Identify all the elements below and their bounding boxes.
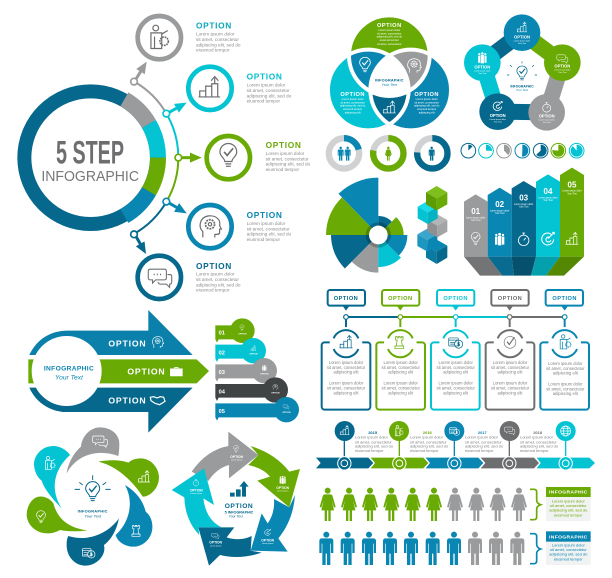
card column 4: Lorem ipsum dolor — [493, 381, 528, 386]
main ring — [24, 91, 157, 224]
arrow column 01 — [464, 194, 488, 257]
center text — [44, 366, 94, 381]
arrow column 04 — [536, 174, 560, 257]
card column 1: adipiscing elit — [334, 370, 359, 375]
arrow column 02 — [488, 188, 512, 257]
card column 2: adipiscing elit — [388, 370, 414, 375]
cycle arrow: dark: Lorem ipsum — [210, 544, 222, 547]
node: green: Your Text — [558, 71, 567, 74]
donut 3 — [417, 138, 447, 168]
cycle arrow: blue: Lorem ipsum — [262, 542, 274, 545]
panel: pentagon blob diagram — [464, 14, 581, 131]
arrow: blue — [163, 198, 187, 213]
banner 05 — [215, 397, 299, 422]
text block: option 4: eiusmod tempor — [247, 237, 280, 242]
banner 04 — [215, 377, 288, 403]
center bulb and text: Your Text — [84, 514, 102, 519]
center: bulb and text: INFOGRAPHIC — [510, 85, 534, 89]
mini pie 1 — [461, 143, 476, 158]
card column 3: Lorem ipsum dolor — [438, 381, 473, 386]
node: blue: Your Text — [518, 42, 527, 45]
node: green — [544, 44, 581, 81]
banner 03 — [215, 358, 277, 383]
center chart and text: 5 INFOGRAPHIC — [225, 511, 254, 515]
node: blue: OPTION — [514, 35, 530, 40]
panel: year timeline — [316, 421, 595, 565]
card column 5: adipiscing elit — [553, 391, 579, 396]
arrow column 05: Your Text — [567, 192, 577, 195]
panel: swirl flower diagram — [27, 427, 159, 566]
text block: option 1: OPTION — [196, 20, 232, 30]
card column 4: adipiscing elit — [498, 390, 523, 395]
node: green: OPTION — [554, 64, 570, 69]
pictogram row: men — [319, 532, 524, 565]
card column 2: adipiscing elit — [388, 390, 414, 395]
text: blue option: OPTION — [414, 92, 439, 98]
text block: option 1: adipiscing elit, sed do — [196, 42, 241, 47]
banner 01 — [215, 318, 255, 343]
arrow column 03 — [512, 181, 536, 257]
panel: big three way arrow — [28, 310, 209, 433]
text block: option 3: sit amet, consectetur — [266, 156, 309, 161]
step circle 3 — [207, 136, 250, 179]
cycle arrow: cyan: OPTION — [190, 488, 203, 492]
text block: option 4: sit amet, consectetur — [247, 226, 290, 231]
cycle arrow: gray: Lorem ipsum — [231, 459, 243, 462]
arrow column 03: Lorem ipsum dolor — [514, 203, 534, 206]
center: bulb and text: Your Text — [516, 88, 528, 92]
text: blue option: Lorem ipsum dolor — [416, 97, 438, 101]
mini pie 4 — [515, 143, 530, 158]
cycle arrow: green — [248, 446, 300, 507]
arrow column 02: Your Text — [495, 212, 505, 215]
node: gray: Your Text — [543, 121, 551, 124]
text: green option: Lorem ipsum dolor — [378, 28, 400, 32]
cycle arrow: cyan: Lorem ipsum — [191, 492, 202, 495]
arrow: middle green — [28, 359, 209, 383]
card column 5: adipiscing elit — [553, 371, 579, 376]
timeline text 2017: eiusmod tempor — [465, 448, 494, 453]
arrow column 01: 01 — [471, 207, 481, 216]
cycle arrow: cyan — [172, 468, 222, 535]
text: cyan option: adipiscing elit, sed do — [340, 104, 366, 108]
card column 1 — [322, 290, 370, 410]
callout: green: Lorem ipsum dolor — [552, 498, 585, 503]
venn circle: cyan — [328, 50, 409, 130]
petal: left green — [27, 497, 87, 533]
text: cyan option: Lorem ipsum dolor — [342, 97, 364, 101]
text: green option: sit amet, consectetur — [377, 42, 402, 46]
mini pie 6 — [551, 143, 566, 158]
card column 3 — [431, 290, 480, 410]
timeline text 2018: sit amet, consectetur — [520, 439, 557, 444]
timeline text 2016: 2016 — [423, 430, 433, 435]
node: cyan: Lorem ipsum dolor — [474, 70, 491, 73]
banner 04: OPTION — [271, 393, 280, 395]
cycle arrow: blue — [251, 495, 295, 552]
arrow: dark — [131, 231, 146, 254]
callout: blue: INFOGRAPHIC — [549, 534, 588, 540]
step circle 2 — [188, 67, 232, 110]
connectors — [482, 33, 562, 112]
venn outlines — [328, 15, 451, 130]
panel: option cards — [322, 290, 589, 410]
banner 03: OPTION — [260, 373, 269, 375]
arrow column shadows — [464, 257, 584, 276]
timeline text 2017: Lorem ipsum dolor — [465, 435, 499, 440]
text block: option 5: sit amet, consectetur — [196, 277, 239, 282]
text block: option 4: adipiscing elit, sed do — [247, 232, 292, 237]
connector arc: gray — [134, 82, 167, 114]
text: cyan option: OPTION — [340, 92, 365, 98]
arrow column 02: Lorem ipsum dolor — [490, 209, 510, 212]
banner 02: OPTION — [249, 353, 258, 355]
text block: option 2: OPTION — [247, 71, 283, 81]
card column 2: Lorem ipsum dolor — [383, 360, 418, 365]
callout: blue: Lorem ipsum dolor — [552, 542, 585, 547]
petal: right green — [98, 458, 159, 497]
timeline text 2015: 2015 — [368, 430, 378, 435]
label: middle option — [127, 366, 183, 376]
radial pie chart — [326, 178, 407, 273]
text block: option 4: Lorem ipsum dolor — [247, 221, 286, 226]
center chart and text — [225, 481, 254, 518]
node: blue: Lorem ipsum dolor — [514, 40, 531, 43]
timeline text 2018: adipiscing elit, sed do — [520, 444, 559, 449]
timeline text 2016 — [410, 430, 449, 453]
card column 2: OPTION — [388, 296, 413, 302]
brace: blue — [530, 534, 541, 564]
label: lower option — [108, 395, 165, 405]
card column 2: sit amet, consectetur — [381, 386, 420, 391]
text: blue option — [414, 92, 440, 115]
node: cyan: Your Text — [478, 72, 487, 75]
arrow column 04: 04 — [544, 187, 553, 196]
petal: gray — [67, 427, 119, 473]
overlap: center — [372, 58, 407, 94]
timeline text 2015: Lorem ipsum dolor — [355, 435, 389, 440]
text block: option 5: Lorem ipsum dolor — [196, 272, 235, 277]
text: green option — [377, 23, 403, 46]
timeline text 2016: Lorem ipsum dolor — [410, 435, 444, 440]
arrow column 01: Lorem ipsum dolor — [466, 216, 486, 219]
banner 05: 05 — [219, 409, 225, 415]
card column 5 — [540, 290, 589, 410]
arrow: upper blue — [29, 310, 193, 355]
text block: option 1: sit amet, consectetur — [196, 37, 239, 42]
card column 1: sit amet, consectetur — [327, 365, 366, 370]
text: green option: sit amet, consectetur — [377, 31, 402, 35]
panel: 5 step circular infographic — [24, 16, 311, 299]
donut 2 — [373, 138, 403, 168]
text block: option 3: eiusmod tempor — [266, 167, 299, 172]
arrow column 05: 05 — [568, 180, 577, 189]
text block: option 2: adipiscing elit, sed do — [247, 93, 292, 98]
cycle arrow: gray — [192, 432, 258, 481]
text block: option 3: adipiscing elit, sed do — [266, 162, 311, 167]
node: green: Lorem ipsum dolor — [554, 69, 571, 72]
arrow: lower dark — [29, 388, 193, 433]
node: dark: OPTION — [490, 113, 506, 118]
panel: donuts, mini pies, radial pie, cubes and arrow columns — [326, 138, 584, 276]
step circle 5 — [138, 256, 181, 299]
center text: Your Text — [55, 374, 84, 381]
banner 02 — [215, 338, 266, 363]
callout: green: eiusmod tempor — [554, 512, 583, 517]
card column 1: adipiscing elit — [334, 390, 359, 395]
card column 3: adipiscing elit — [443, 390, 469, 395]
cycle arrow: dark — [198, 527, 262, 566]
callout: blue: eiusmod tempor — [554, 556, 583, 561]
icon: bulb — [360, 57, 370, 72]
milestone 2015 — [335, 421, 355, 470]
text block: option 2: sit amet, consectetur — [247, 88, 290, 93]
node: gray: OPTION — [539, 114, 555, 119]
timeline text 2015: eiusmod tempor — [355, 448, 384, 453]
icon: chart — [383, 101, 396, 113]
banner 04: 04 — [219, 390, 226, 396]
text block: option 4 — [247, 210, 292, 242]
label: lower option: OPTION — [108, 395, 147, 405]
card column 1: Lorem ipsum dolor — [329, 381, 364, 386]
text: green option: eiusmod tempor — [380, 38, 399, 42]
overlap: green and blue — [393, 52, 428, 88]
center: bulb and text — [507, 61, 537, 92]
label: upper option: OPTION — [108, 338, 147, 348]
text: cyan option: eiusmod tempor — [343, 107, 362, 111]
step circle 1 — [138, 16, 181, 59]
text block: option 5 — [196, 261, 241, 293]
arrow column 02: 02 — [495, 200, 505, 209]
timeline text 2016: adipiscing elit, sed do — [410, 444, 449, 449]
center chart and text: OPTION — [225, 503, 253, 510]
milestone 2019 — [556, 421, 576, 470]
arrow: gray — [131, 62, 147, 85]
petal: cyan — [34, 446, 70, 508]
banner 05: OPTION — [282, 412, 291, 414]
donut 1 — [329, 138, 359, 168]
text: cyan option — [340, 92, 366, 115]
node: blue — [504, 14, 540, 51]
panel: five arrow cycle — [172, 432, 300, 566]
timeline text 2017: sit amet, consectetur — [465, 439, 502, 444]
connector arc: green — [167, 158, 178, 201]
text block: option 1: Lorem ipsum dolor — [196, 32, 235, 37]
text: venn center: Your Text — [382, 83, 398, 87]
text block: option 3: Lorem ipsum dolor — [266, 151, 305, 156]
card column 4: adipiscing elit — [498, 370, 523, 375]
arrow column 05: Lorem ipsum dolor — [562, 190, 582, 193]
text: cyan option: sit amet, consectetur — [340, 100, 365, 104]
mini pie 2 — [479, 143, 493, 158]
arrow column 01: Your Text — [471, 219, 481, 222]
card column 4 — [486, 290, 534, 410]
card column 2: sit amet, consectetur — [381, 365, 420, 370]
timeline text 2015: adipiscing elit, sed do — [355, 444, 394, 449]
panel: venn diagram — [328, 15, 451, 130]
card column 5: Lorem ipsum dolor — [548, 381, 583, 386]
node: gray — [528, 94, 565, 131]
ring segment: green — [142, 158, 166, 195]
mini pie 5 — [533, 143, 548, 158]
text block: option 2: eiusmod tempor — [247, 99, 280, 104]
arrow column 05 — [560, 168, 584, 257]
ring segment: gray — [120, 92, 156, 128]
cycle arrow: blue: OPTION — [261, 538, 275, 542]
callout: blue: adipiscing elit, sed do — [549, 552, 588, 557]
overlap: green and cyan — [351, 52, 386, 88]
arrow: green — [175, 153, 202, 163]
connector arc: cyan — [167, 114, 178, 158]
overlap: cyan and blue — [372, 94, 406, 122]
text: blue option: sit amet, consectetur — [414, 100, 439, 104]
subtitle: INFOGRAPHIC: INFOGRAPHIC — [41, 169, 139, 185]
panel: stepped banners — [215, 318, 299, 422]
node: gray: Lorem ipsum dolor — [538, 119, 555, 122]
pictogram row: women — [320, 488, 527, 521]
center white circle — [32, 336, 102, 406]
node: dark — [479, 93, 516, 130]
label: upper option — [108, 337, 164, 348]
arrow column 04: Your Text — [543, 199, 553, 202]
banner 02: 02 — [219, 350, 225, 356]
text block: option 5: adipiscing elit, sed do — [196, 282, 241, 287]
card column 1: OPTION — [334, 296, 358, 302]
milestone 2016 — [389, 421, 409, 470]
timeline text 2015 — [355, 430, 394, 453]
venn circle: green — [349, 15, 430, 96]
node: cyan — [464, 44, 501, 81]
connector arc: blue — [134, 201, 167, 234]
arrow: cyan — [163, 103, 187, 117]
mini pie 7 — [569, 143, 584, 158]
card column 2 — [376, 290, 425, 410]
text block: option 3: OPTION — [266, 140, 302, 150]
callout: blue — [546, 531, 591, 565]
ring segment: cyan — [142, 120, 166, 158]
cycle arrow: green: Lorem ipsum — [277, 490, 289, 493]
card column 3: sit amet, consectetur — [436, 365, 475, 370]
text block: option 4: OPTION — [247, 210, 283, 220]
card column 1: sit amet, consectetur — [327, 386, 366, 391]
timeline text 2016: eiusmod tempor — [410, 448, 439, 453]
card column 3: sit amet, consectetur — [436, 386, 475, 391]
text: blue option: adipiscing elit — [419, 111, 435, 115]
banner 03: 03 — [219, 370, 225, 376]
arrow column 03: Your Text — [519, 206, 529, 209]
venn circle: blue — [370, 50, 451, 130]
card column 4: OPTION — [498, 296, 522, 302]
cube stack — [417, 186, 447, 264]
cycle arrow: green: OPTION — [276, 486, 290, 490]
cycle arrow: dark: OPTION — [209, 541, 223, 545]
milestone 2018 — [500, 421, 520, 470]
text block: option 1 — [196, 20, 241, 53]
card column 5: Lorem ipsum dolor — [548, 361, 583, 366]
node: dark: Your Text — [494, 120, 502, 123]
card column 1: Lorem ipsum dolor — [329, 360, 364, 365]
text block: option 5: OPTION — [196, 261, 232, 271]
text: green option: OPTION — [377, 23, 402, 29]
text block: option 3 — [266, 140, 311, 172]
timeline text 2018: Lorem ipsum dolor — [520, 435, 554, 440]
timeline text 2017: 2017 — [478, 430, 488, 435]
text block: option 1: eiusmod tempor — [196, 48, 230, 53]
cycle arrow: gray: OPTION — [230, 455, 244, 459]
top connector line — [346, 314, 565, 320]
timeline text 2016: sit amet, consectetur — [410, 439, 447, 444]
center bulb and text: INFOGRAPHIC — [78, 509, 108, 514]
milestone 2017 — [444, 421, 464, 470]
banner 01: OPTION — [238, 334, 247, 336]
card column 2: Lorem ipsum dolor — [383, 381, 418, 386]
text: venn center — [375, 78, 404, 87]
banner 01: 01 — [219, 331, 225, 337]
callout: green: adipiscing elit, sed do — [549, 508, 588, 513]
petal: blue — [116, 485, 152, 547]
text block: option 5: eiusmod tempor — [196, 288, 230, 293]
timeline text 2018: 2018 — [533, 430, 543, 435]
callout: green — [546, 487, 591, 521]
node: dark: Lorem ipsum dolor — [489, 118, 506, 121]
petal: dark — [67, 518, 119, 566]
callout: blue: sit amet, consectetur — [550, 547, 587, 552]
brace: green — [530, 489, 541, 520]
center bulb and text — [75, 475, 111, 519]
timeline text 2017 — [465, 430, 504, 453]
callout: green: sit amet, consectetur — [550, 503, 587, 508]
step circle 4 — [188, 205, 232, 248]
card column 5: sit amet, consectetur — [546, 366, 585, 371]
center chart and text: Your Text — [229, 514, 244, 518]
label: middle option: OPTION — [127, 366, 166, 376]
timeline text 2018: eiusmod tempor — [520, 448, 549, 453]
callout: green: INFOGRAPHIC — [549, 490, 588, 496]
text: cyan option: adipiscing elit — [345, 111, 361, 115]
icon: head — [408, 59, 421, 73]
chevron bar — [316, 458, 595, 468]
arrow column 03: 03 — [519, 194, 529, 203]
text: green option: adipiscing elit, sed do — [377, 35, 403, 39]
node: cyan: OPTION — [474, 65, 490, 70]
card column 4: sit amet, consectetur — [491, 365, 530, 370]
ring segment: blue — [120, 187, 156, 223]
mini pie 3 — [497, 143, 511, 158]
card column 3: OPTION — [443, 296, 468, 302]
text: blue option: eiusmod tempor — [417, 107, 436, 111]
timeline text 2015: sit amet, consectetur — [355, 439, 392, 444]
card column 3: Lorem ipsum dolor — [438, 360, 473, 365]
card column 3: adipiscing elit — [443, 370, 469, 375]
arrow column 04: Lorem ipsum dolor — [538, 196, 558, 199]
title: 5 STEP: 5 STEP — [56, 134, 124, 170]
text: venn center: INFOGRAPHIC — [375, 78, 404, 82]
card column 4: Lorem ipsum dolor — [493, 360, 528, 365]
text block: option 2 — [247, 71, 292, 104]
card column 4: sit amet, consectetur — [491, 386, 530, 391]
center text: INFOGRAPHIC — [44, 366, 94, 373]
text block: option 2: Lorem ipsum dolor — [247, 83, 286, 88]
card column 5: OPTION — [552, 296, 577, 302]
timeline text 2018 — [520, 430, 559, 453]
card column 5: sit amet, consectetur — [546, 386, 585, 391]
timeline text 2017: adipiscing elit, sed do — [465, 444, 504, 449]
text: blue option: adipiscing elit, sed do — [414, 104, 440, 108]
